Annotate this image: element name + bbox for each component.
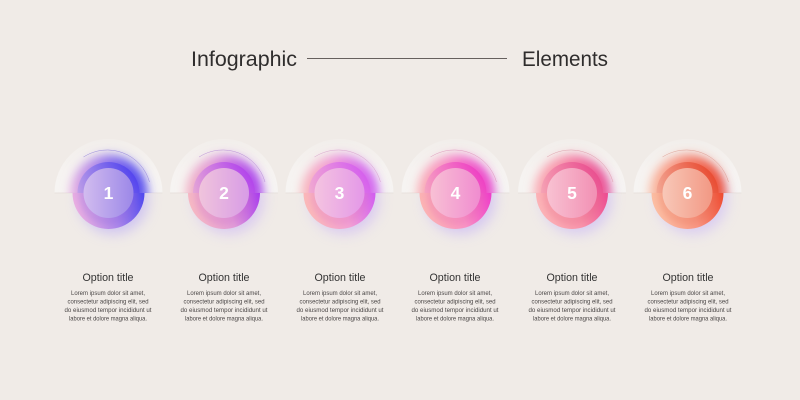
step 3 circle [286,139,394,234]
title left word: Infographic [191,48,297,71]
option 2 text: Option title [198,272,250,284]
option 3 text: Lorem ipsum dolor sit amet, [303,290,377,297]
option 5 text [528,272,616,322]
option 6 text: consectetur adipiscing elit, sed [648,298,729,306]
number 6: 6 [683,183,693,203]
number 5: 5 [567,183,577,203]
option 4 text [412,272,499,322]
option 6 text: Lorem ipsum dolor sit amet, [651,290,725,297]
option 5 text: do eiusmod tempor incididunt ut [528,307,616,314]
title right word: Elements [522,48,608,71]
option 2 text: do eiusmod tempor incididunt ut [180,307,268,314]
option 5 text: Option title [546,272,598,284]
step 1 circle [54,139,162,234]
option 6 text: do eiusmod tempor incididunt ut [644,307,732,314]
option 3 text: consectetur adipiscing elit, sed [300,298,381,306]
option 1 text: do eiusmod tempor incididunt ut [64,307,152,314]
option 1 text: Lorem ipsum dolor sit amet, [71,290,145,297]
option 3 text [296,272,384,322]
option 4 text: Option title [430,272,480,284]
option 4 text: consectetur adipiscing elit, sed [414,298,496,306]
option 1 text: Option title [82,272,134,284]
option 4 text: labore et dolore magna aliqua. [416,316,494,322]
step 2 circle [170,139,278,234]
option 1 text: consectetur adipiscing elit, sed [68,298,149,306]
option 3 text: labore et dolore magna aliqua. [301,316,379,322]
option 4 text: do eiusmod tempor incididunt ut [412,307,499,314]
step 4 circle [402,139,510,234]
option 4 text: Lorem ipsum dolor sit amet, [418,290,492,297]
title [191,48,608,71]
option 6 text [644,272,732,322]
option 3 text: do eiusmod tempor incididunt ut [296,307,384,314]
option 6 text: Option title [662,272,714,284]
option 2 text: Lorem ipsum dolor sit amet, [187,290,261,297]
option 1 text: labore et dolore magna aliqua. [69,316,147,322]
option 5 text: labore et dolore magna aliqua. [533,316,611,322]
number 2: 2 [219,183,229,203]
option 2 text: consectetur adipiscing elit, sed [184,298,265,306]
option 1 text [64,272,152,322]
option 6 text: labore et dolore magna aliqua. [649,316,727,322]
step 6 circle [634,139,742,234]
option 3 text: Option title [314,272,366,284]
number 4: 4 [451,183,461,203]
option 5 text: consectetur adipiscing elit, sed [532,298,613,306]
number 3: 3 [335,183,345,203]
option 5 text: Lorem ipsum dolor sit amet, [535,290,609,297]
step 5 circle [518,139,626,234]
option 2 text [180,272,268,322]
number 1: 1 [104,183,114,203]
option 2 text: labore et dolore magna aliqua. [185,316,263,322]
